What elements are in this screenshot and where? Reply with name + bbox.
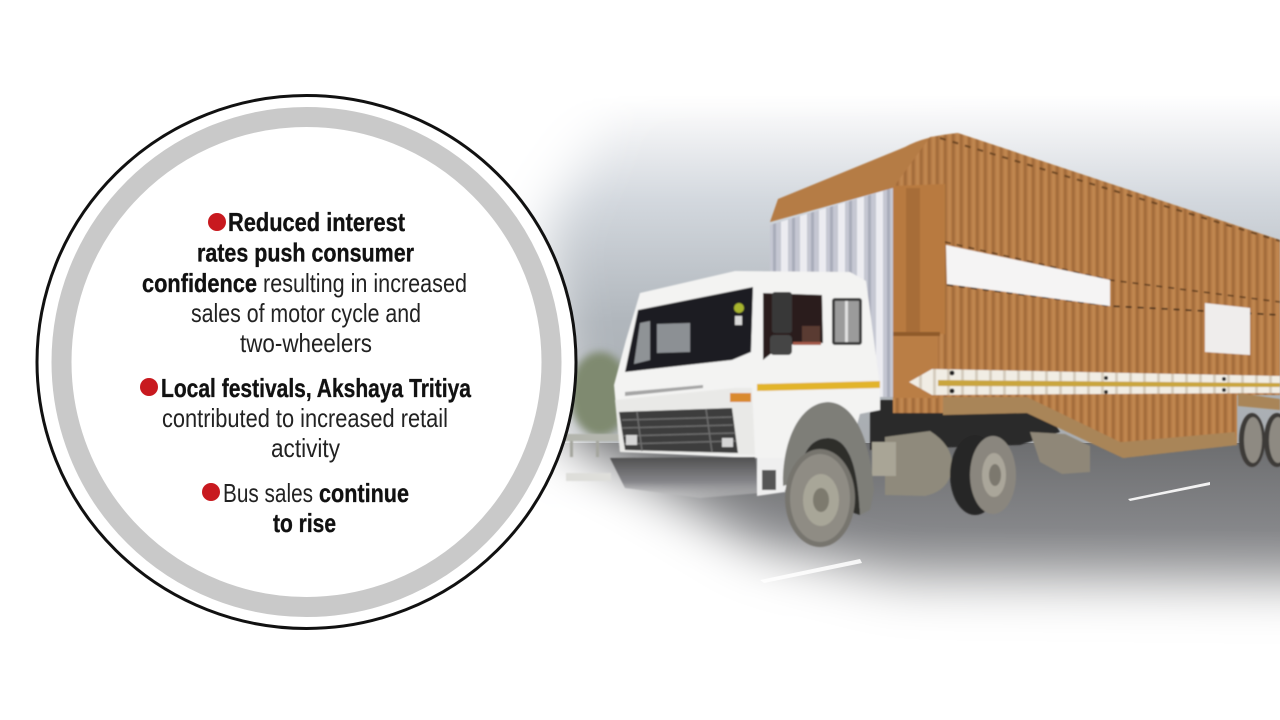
cab xyxy=(610,271,880,498)
text: reduced interest rates: Reduced interest xyxy=(228,207,405,237)
bumper xyxy=(610,457,760,498)
circular text panel xyxy=(37,96,576,628)
text: local festivals: Local festivals, Akshaya Tritiya xyxy=(161,373,471,403)
text: reduced interest rates: rates push consumer xyxy=(197,238,414,268)
trailer rear wheels xyxy=(1239,413,1280,467)
red bullet 2 xyxy=(140,378,158,396)
text: local festivals: activity xyxy=(271,433,340,463)
photo: truck on highway xyxy=(532,115,1280,618)
chassis and fuel tank xyxy=(870,400,1090,496)
bullet point: bus sales xyxy=(202,478,409,538)
text: reduced interest rates: two-wheelers xyxy=(240,328,372,358)
text: reduced interest rates: sales of motor cycle and xyxy=(191,298,421,328)
cab body xyxy=(614,271,880,490)
red bullet 1 xyxy=(208,213,226,231)
red bullet 3 xyxy=(202,483,220,501)
guard rail xyxy=(560,434,622,481)
grille xyxy=(619,408,738,453)
white panel, large xyxy=(946,245,1110,306)
bullet point: local festivals xyxy=(140,373,471,463)
text: reduced interest rates: resulting in increased xyxy=(263,268,467,298)
text: reduced interest rates: confidence xyxy=(142,268,257,298)
indicator lamp xyxy=(730,393,751,402)
truck xyxy=(610,133,1280,547)
bullet point: reduced interest rates xyxy=(142,207,467,358)
trees xyxy=(570,352,630,436)
windscreen xyxy=(625,287,753,372)
white panel, small xyxy=(1205,303,1250,355)
front wheel xyxy=(785,449,855,547)
front wheel arch xyxy=(783,402,874,515)
trailer lower frame xyxy=(943,393,1280,458)
photo background: sky and road xyxy=(532,115,1280,618)
outer black ring xyxy=(37,96,576,628)
door window and mirrors xyxy=(763,292,823,360)
text: bus sales xyxy=(223,478,409,538)
text: reduced interest rates xyxy=(142,207,467,358)
infographic canvas xyxy=(36,94,1280,630)
trailer side xyxy=(893,133,1280,458)
trailer roof and front xyxy=(770,133,958,397)
text: local festivals: contributed to increased retail xyxy=(162,403,448,433)
rear cab window xyxy=(832,298,862,345)
cab lower step xyxy=(757,458,785,496)
hood trim xyxy=(625,385,703,396)
text: bus sales: to rise xyxy=(273,508,336,538)
grey inner ring xyxy=(62,117,552,607)
text: bus sales: continue xyxy=(319,478,409,508)
reflective band xyxy=(909,369,1280,395)
text: local festivals xyxy=(161,373,471,463)
text: bus sales: Bus sales xyxy=(223,478,313,508)
yellow cab stripe xyxy=(757,381,880,391)
rear drive wheel xyxy=(950,435,1016,515)
